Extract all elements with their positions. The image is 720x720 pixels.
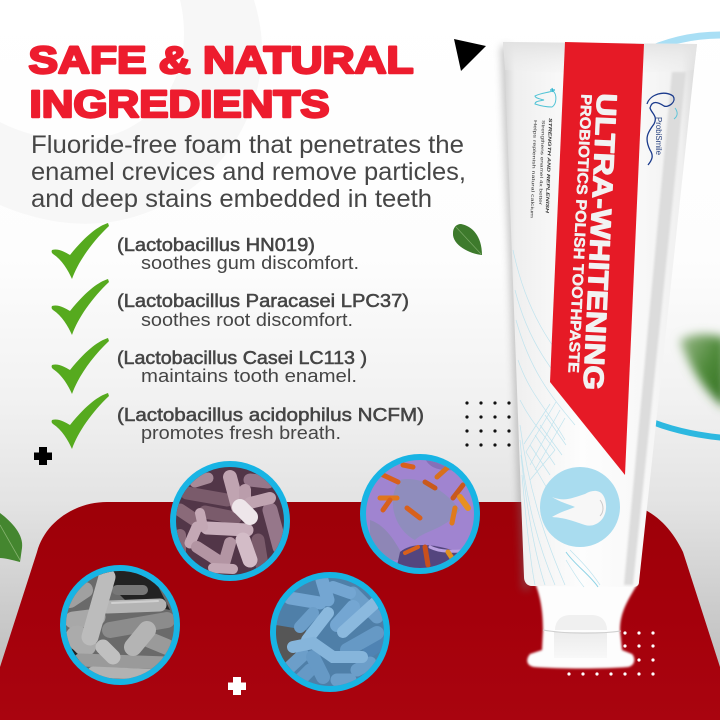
white dot grid (567, 631, 655, 676)
benefit text: STRENGTH AND REPLENISH (545, 118, 553, 214)
title (28, 40, 414, 126)
check item 2: soothes root discomfort. (141, 309, 353, 330)
tooth line icon (535, 88, 556, 107)
check item 2: (Lactobacillus Paracasei LPC37) (117, 290, 409, 311)
description text: enamel crevices and remove particles, (31, 158, 466, 186)
description text (31, 131, 466, 213)
check item 1: (Lactobacillus HN019) (117, 234, 315, 255)
check item 4 (52, 393, 424, 449)
benefit text (530, 118, 553, 219)
icon: small leaf (453, 224, 482, 255)
brand logo: ProbiSmile (654, 117, 664, 155)
background swoosh (0, 0, 262, 224)
check item 1: soothes gum discomfort. (141, 252, 359, 273)
tube body (503, 42, 697, 587)
blue swoosh lower (645, 419, 720, 438)
icon: blurred leaf right (680, 334, 720, 408)
bacteria circle: pink (170, 461, 290, 581)
benefit text: Strengthens enamel 4x better (538, 120, 546, 206)
title: SAFE & NATURAL (28, 40, 414, 82)
description text: and deep stains embedded in teeth (31, 185, 432, 213)
check item 4: (Lactobacillus acidophilus NCFM) (117, 404, 424, 425)
bacteria circle: purple (360, 452, 480, 575)
check item 1 (52, 223, 359, 279)
tube nozzle and cap (527, 583, 638, 668)
black dot grid (465, 401, 511, 447)
icon: leaf left (0, 513, 22, 562)
icon: white plus (228, 677, 246, 695)
brand logo (647, 93, 677, 165)
red label band (550, 42, 644, 475)
product name: PROBIOTICS POLISH TOOTHPASTE (564, 94, 594, 373)
description text: Fluoride-free foam that penetrates the (31, 131, 464, 159)
title: INGREDIENTS (30, 84, 330, 126)
tube right shading (624, 72, 686, 585)
tube shadow (501, 46, 530, 590)
checklist (52, 223, 424, 449)
product name: ULTRA-WHITENING (578, 93, 622, 391)
icon: decorative black triangle (454, 39, 486, 71)
tube crimp band (503, 42, 697, 73)
wave line pattern (513, 250, 600, 587)
check item 2 (52, 279, 409, 335)
red platform panel (0, 502, 720, 720)
product name (564, 93, 622, 391)
check item 4: promotes fresh breath. (141, 422, 341, 443)
check item 3: (Lactobacillus Casei LC113 ) (117, 347, 367, 368)
check item 3 (52, 338, 367, 394)
bacteria circle: gray (60, 565, 180, 685)
icon: black plus (34, 447, 52, 465)
check item 3: maintains tooth enamel. (141, 365, 357, 386)
toothpaste tube (501, 42, 697, 668)
benefit text: Helps replenish natural calcium (530, 120, 538, 219)
tooth badge (540, 467, 620, 547)
bacteria circle: blue (270, 572, 390, 692)
blue swoosh top (640, 35, 720, 54)
